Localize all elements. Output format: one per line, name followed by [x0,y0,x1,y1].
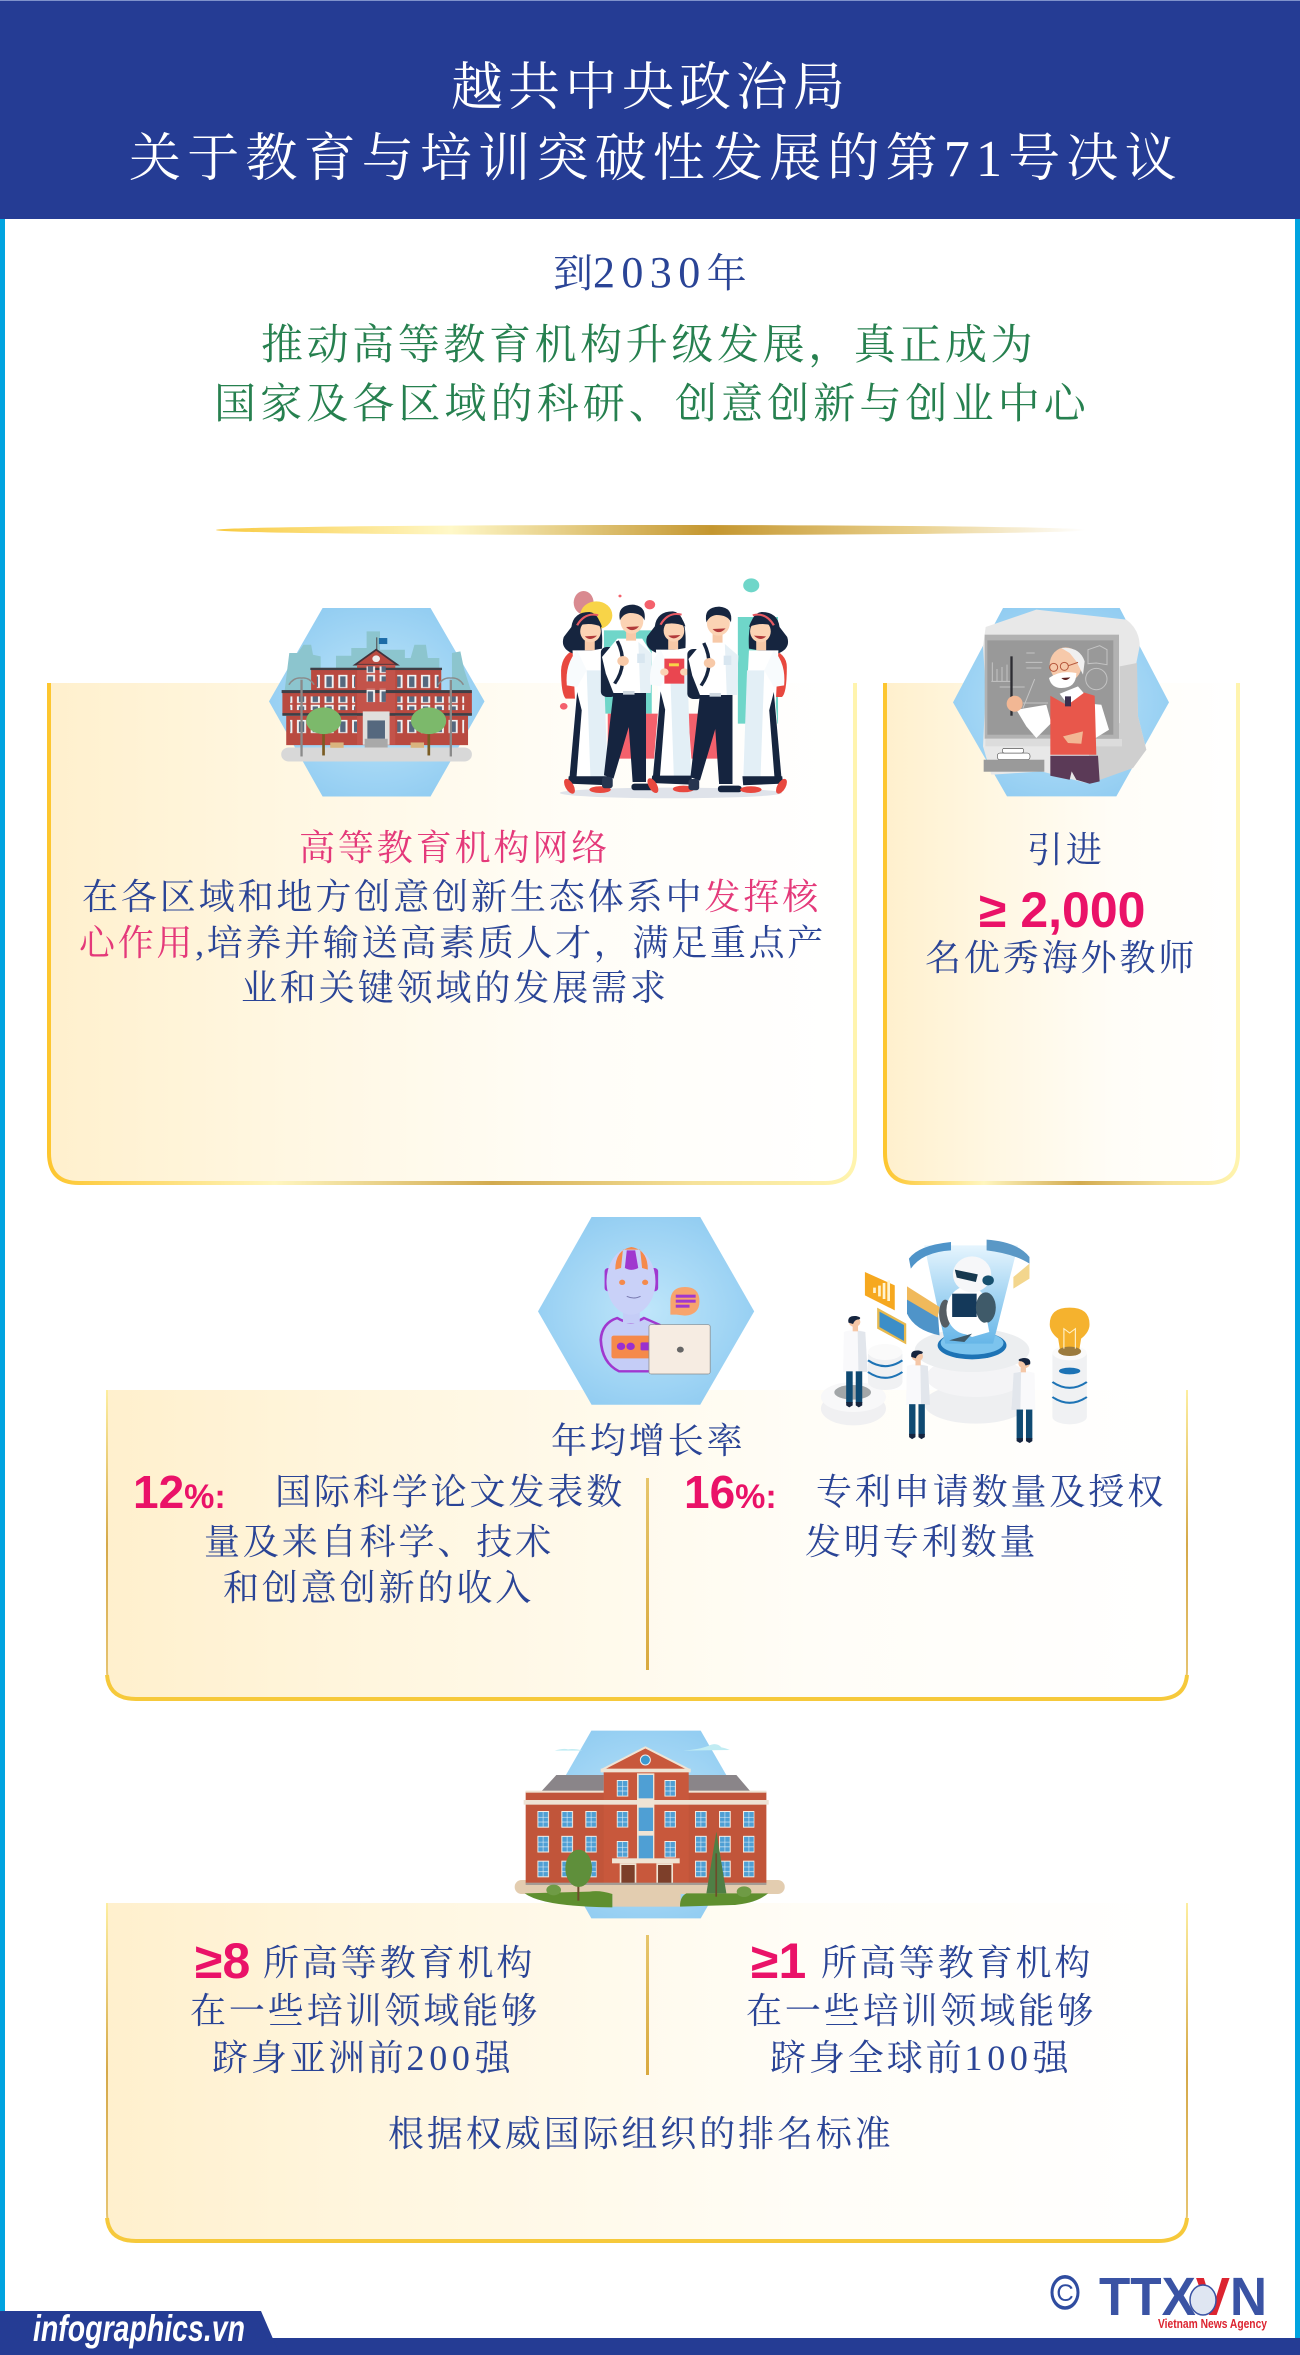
title line 2: 关于教育与培训突破性发展的第71号决议 [129,131,1183,188]
stat 12 text line 2: 量及来自科学、技术 [204,1522,554,1562]
year heading: 到2030年 [553,248,747,297]
left blue frame [0,219,5,2311]
icon: AI robot with laptop in hexagon [538,1217,754,1405]
stat asia line 1: 所高等教育机构 [263,1943,535,1983]
title line 1: 越共中央政治局 [451,60,850,117]
footer tab: infographics.vn: infographics.vn [33,2308,245,2349]
header band [0,0,1300,219]
logo: TTXVN Vietnam News Agency: C [1056,2280,1074,2307]
caption: 名优秀海外教师 [925,938,1197,978]
stat 12 percent: 12%: [133,1466,226,1518]
green subtitle line 2: 国家及各区域的科研、创意创新与创业中心 [214,382,1090,428]
illustration: robot lab with scientists [821,1240,1090,1443]
icon: university campus in hexagon [269,608,484,796]
logo: TTXVN Vietnam News Agency: TTXVN [1099,2267,1267,2327]
body line 1: 在各区域和地方创意创新生态体系中发挥核 [82,877,821,917]
panel: higher education network [47,683,857,1185]
stat world line 2: 在一些培训领域能够 [746,1991,1096,2031]
panel: annual growth [105,1390,1189,1701]
stat asia number: ≥8 [195,1933,250,1989]
stat world line 3: 跻身全球前100强 [770,2038,1072,2078]
panel heading: 高等教育机构网络 [299,828,610,868]
footer band [0,2338,1300,2355]
stat 16 text line 2: 发明专利数量 [805,1522,1038,1562]
panel: overseas teachers [883,683,1240,1185]
stat asia line 2: 在一些培训领域能够 [190,1991,540,2031]
big number: ≥ 2,000 [979,882,1145,938]
gold divider [216,525,1074,535]
panel: global rankings [105,1903,1189,2243]
body line 2: 心作用,培养并输送高素质人才，满足重点产 [79,923,826,963]
stat 16 percent: 16%: [684,1466,777,1518]
intro word: 引进 [1027,830,1105,870]
right blue frame [1295,219,1300,2339]
green subtitle line 1: 推动高等教育机构升级发展，真正成为 [261,323,1036,369]
body line 3: 业和关键领域的发展需求 [241,968,669,1008]
illustration: brick university building [514,1730,785,1918]
stat world line 1: 所高等教育机构 [821,1943,1093,1983]
stat 12 text line 1: 国际科学论文发表数 [275,1472,625,1512]
stat 12 text line 3: 和创意创新的收入 [223,1568,534,1608]
panel heading: 年均增长率 [551,1421,746,1461]
ranking note: 根据权威国际组织的排名标准 [388,2114,894,2154]
icon: teacher at blackboard in hexagon [953,608,1169,796]
logo: TTXVN Vietnam News Agency: Vietnam News Agency [1158,2316,1268,2331]
stat asia line 3: 跻身亚洲前200强 [212,2038,514,2078]
illustration: five students [560,578,788,798]
stat world number: ≥1 [751,1933,806,1989]
stat 16 text line 1: 专利申请数量及授权 [816,1472,1166,1512]
